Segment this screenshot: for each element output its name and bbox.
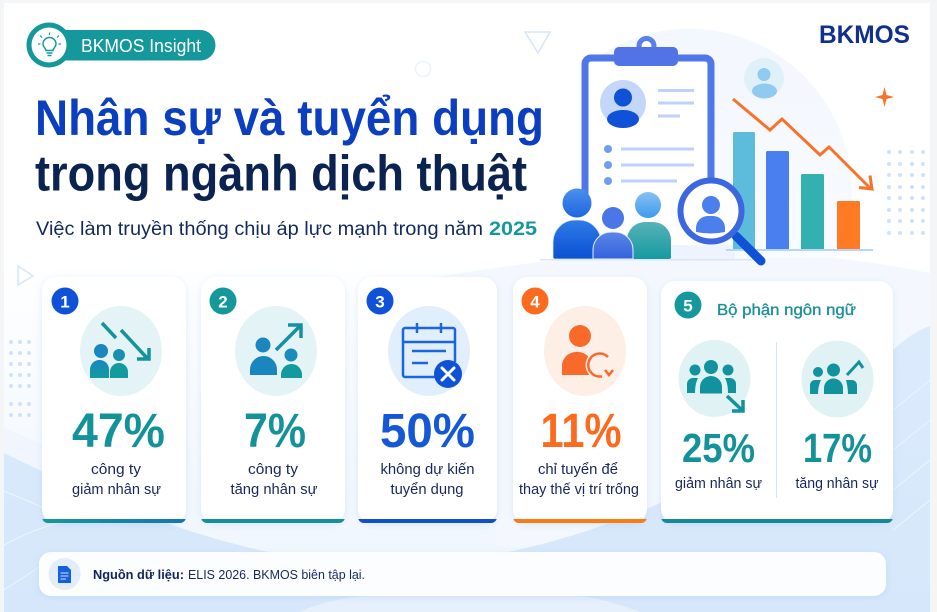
people group	[553, 188, 671, 259]
title	[35, 90, 544, 202]
icon: calendar cancelled	[388, 306, 470, 396]
panel: card 3: tuyển dụng	[390, 482, 464, 498]
panel: card 4: 11%	[540, 405, 622, 458]
panel: data source footer: Nguồn dữ liệu:	[93, 567, 184, 582]
icon: team increasing	[802, 340, 874, 418]
title: Nhân sự và tuyển dụng	[35, 90, 544, 146]
ground line	[540, 259, 760, 260]
icon: sparkle	[875, 87, 894, 107]
icon: replacement hire	[544, 306, 626, 396]
icon: team decreasing	[678, 340, 750, 417]
panel: card 5 language departments	[661, 281, 893, 523]
clipboard	[585, 38, 735, 259]
icon: people decreasing	[80, 306, 162, 396]
panel: card 1: giảm nhân sự	[72, 482, 161, 498]
panel: card 1: 1	[60, 292, 70, 312]
icon: people increasing	[235, 306, 317, 396]
panel: card 4: 4	[530, 292, 540, 312]
panel: card 4: chỉ tuyển để	[538, 462, 618, 478]
small avatar	[744, 58, 784, 98]
panel: card 3: 50%	[380, 405, 475, 458]
label: tăng nhân sự: tăng nhân sự	[796, 476, 879, 492]
stat: 25%: 25%	[682, 425, 755, 471]
panel: card 2: 2	[218, 292, 228, 312]
panel: card 2	[201, 277, 345, 523]
badge: BKMOS Insight: BKMOS Insight	[81, 36, 201, 56]
stat: 17%: 17%	[803, 425, 872, 471]
label: giảm nhân sự: giảm nhân sự	[675, 476, 762, 492]
icon: document	[58, 566, 71, 583]
panel: card 5 language departments: 5	[683, 296, 693, 316]
panel: card 1: 47%	[72, 405, 165, 458]
panel: data source footer: ELIS 2026. BKMOS biên tập lại.	[188, 567, 365, 582]
title: trong ngành dịch thuật	[35, 146, 527, 202]
heading: Bộ phận ngôn ngữ	[717, 302, 856, 319]
subtitle: 2025	[489, 219, 537, 240]
panel: card 4: thay thế vị trí trống	[519, 482, 639, 498]
panel: card 3: 3	[375, 292, 385, 312]
panel: card 2: 7%	[244, 405, 306, 458]
panel: card 1	[42, 277, 186, 523]
icon: magnifier	[680, 180, 761, 261]
dot pattern	[887, 150, 925, 235]
arrow: falling trend	[733, 99, 872, 189]
logo: BKMOS: BKMOS	[819, 21, 910, 49]
illustration: hiring and decline	[540, 29, 925, 261]
panel: card 1: công ty	[91, 462, 142, 478]
panel: card 3	[358, 277, 497, 523]
panel: data source footer	[39, 552, 886, 596]
panel: card 2: tăng nhân sự	[230, 482, 318, 498]
bar chart	[726, 132, 873, 251]
panel: card 4	[513, 277, 647, 523]
pale backdrop circle	[590, 29, 852, 258]
subtitle: Việc làm truyền thống chịu áp lực mạnh trong năm	[36, 219, 483, 240]
panel: card 2: công ty	[248, 462, 299, 478]
badge: BKMOS Insight	[26, 22, 216, 68]
panel: card 3: không dự kiến	[380, 462, 474, 478]
